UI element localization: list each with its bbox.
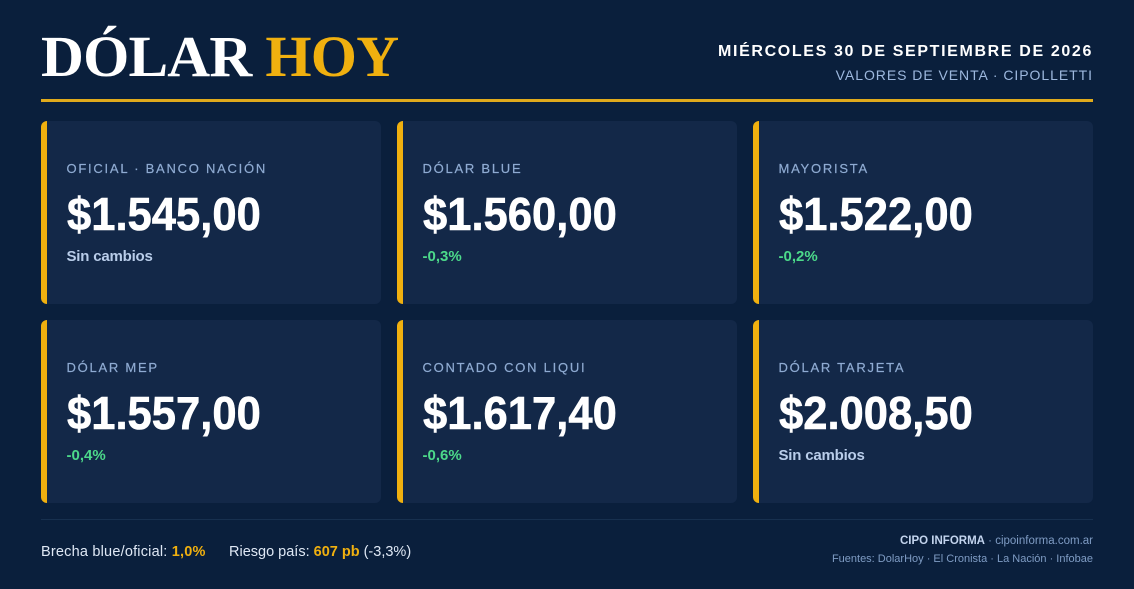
subtitle: VALORES DE VENTA · CIPOLLETTI bbox=[836, 67, 1093, 83]
date: MIÉRCOLES 30 DE SEPTIEMBRE DE 2026 bbox=[718, 43, 1093, 60]
panel: ccl bbox=[397, 320, 737, 503]
change: -0,6% bbox=[422, 447, 462, 464]
value: $1.617,40 bbox=[423, 387, 616, 439]
label: OFICIAL · BANCO NACIÓN bbox=[66, 160, 267, 176]
change: Sin cambios bbox=[778, 447, 865, 464]
title: DÓLAR HOY bbox=[41, 24, 398, 89]
change: -0,3% bbox=[422, 248, 462, 265]
panel: blue bbox=[397, 121, 737, 304]
value: $1.545,00 bbox=[67, 188, 260, 240]
label: DÓLAR MEP bbox=[66, 360, 159, 374]
panel: mep bbox=[41, 320, 381, 503]
label: CONTADO CON LIQUI bbox=[422, 360, 586, 374]
label: DÓLAR TARJETA bbox=[778, 360, 905, 374]
value: $1.557,00 bbox=[67, 387, 260, 439]
footer: credit: CIPO INFORMA · cipoinforma.com.ar bbox=[900, 535, 1093, 547]
change: -0,4% bbox=[66, 447, 106, 464]
value: $1.560,00 bbox=[423, 188, 616, 240]
panel: oficial bbox=[41, 121, 381, 304]
panel: mayorista bbox=[753, 121, 1093, 304]
footer: brecha: Brecha blue/oficial: 1,0% bbox=[41, 544, 206, 560]
header rule bbox=[41, 99, 1093, 102]
footer: sources: Fuentes: DolarHoy · El Cronista · La Nación · Infobae bbox=[832, 553, 1093, 565]
change: Sin cambios bbox=[66, 248, 153, 265]
label: DÓLAR BLUE bbox=[422, 160, 522, 176]
footer: riesgo pais: Riesgo país: 607 pb (-3,3%) bbox=[229, 544, 411, 560]
change: -0,2% bbox=[778, 248, 818, 265]
panel: tarjeta bbox=[753, 320, 1093, 503]
label: MAYORISTA bbox=[778, 160, 869, 176]
footer rule bbox=[41, 519, 1093, 520]
value: $1.522,00 bbox=[779, 188, 972, 240]
value: $2.008,50 bbox=[779, 387, 972, 439]
